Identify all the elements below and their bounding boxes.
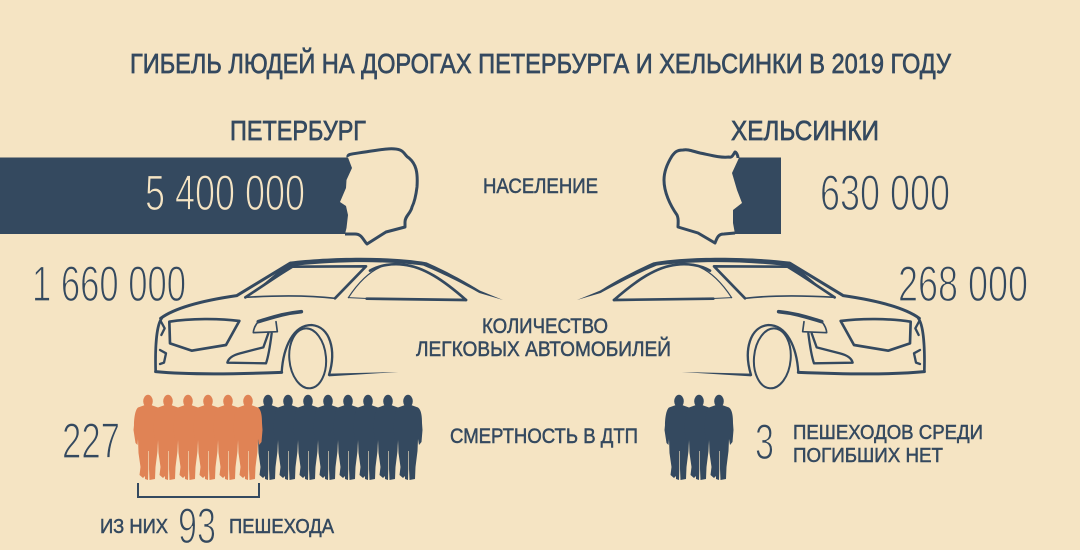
population value left: 5 400 000: [145, 165, 305, 221]
pictogram: Petersburg deaths: [134, 395, 422, 480]
cars value left: 1 660 000: [32, 256, 186, 312]
cars value right: 268 000: [898, 256, 1028, 312]
icon: head outline right: [664, 150, 738, 243]
label: of them pedestrians: ПЕШЕХОДА: [229, 516, 335, 538]
pictogram: Helsinki deaths: [664, 395, 734, 480]
label: of them pedestrians: [100, 498, 335, 550]
icon: car right: [577, 258, 924, 390]
icon: car left: [156, 258, 503, 390]
label: number of cars: [416, 315, 671, 361]
bracket: [138, 483, 259, 497]
label: road mortality: СМЕРТНОСТЬ В ДТП: [450, 425, 638, 448]
label: no pedestrians: [793, 422, 983, 467]
label: population: НАСЕЛЕНИЕ: [483, 175, 598, 198]
navy figures: [254, 395, 422, 480]
heading: Petersburg: ПЕТЕРБУРГ: [230, 115, 366, 146]
population bar left: [0, 158, 352, 234]
icon: head outline left: [345, 149, 417, 244]
panel: Helsinki population bar with head: [664, 150, 950, 243]
label: no pedestrians: ПЕШЕХОДОВ СРЕДИ: [793, 422, 983, 444]
orange figures: [134, 395, 262, 480]
population bar right: [732, 158, 781, 234]
label: number of cars: ЛЕГКОВЫХ АВТОМОБИЛЕЙ: [416, 337, 671, 361]
population value right: 630 000: [820, 165, 950, 221]
label: number of cars: КОЛИЧЕСТВО: [482, 315, 608, 338]
title: ГИБЕЛЬ ЛЮДЕЙ НА ДОРОГАХ ПЕТЕРБУРГА И ХЕЛЬСИНКИ В 2019 ГОДУ: [130, 48, 951, 79]
deaths value Petersburg: 227: [62, 413, 120, 469]
deaths value Helsinki: 3: [755, 414, 774, 470]
label: no pedestrians: ПОГИБШИХ НЕТ: [793, 445, 943, 467]
label: of them pedestrians: ИЗ НИХ: [100, 516, 168, 538]
panel: Petersburg population bar with head: [0, 149, 417, 244]
heading: Helsinki: ХЕЛЬСИНКИ: [731, 115, 879, 146]
